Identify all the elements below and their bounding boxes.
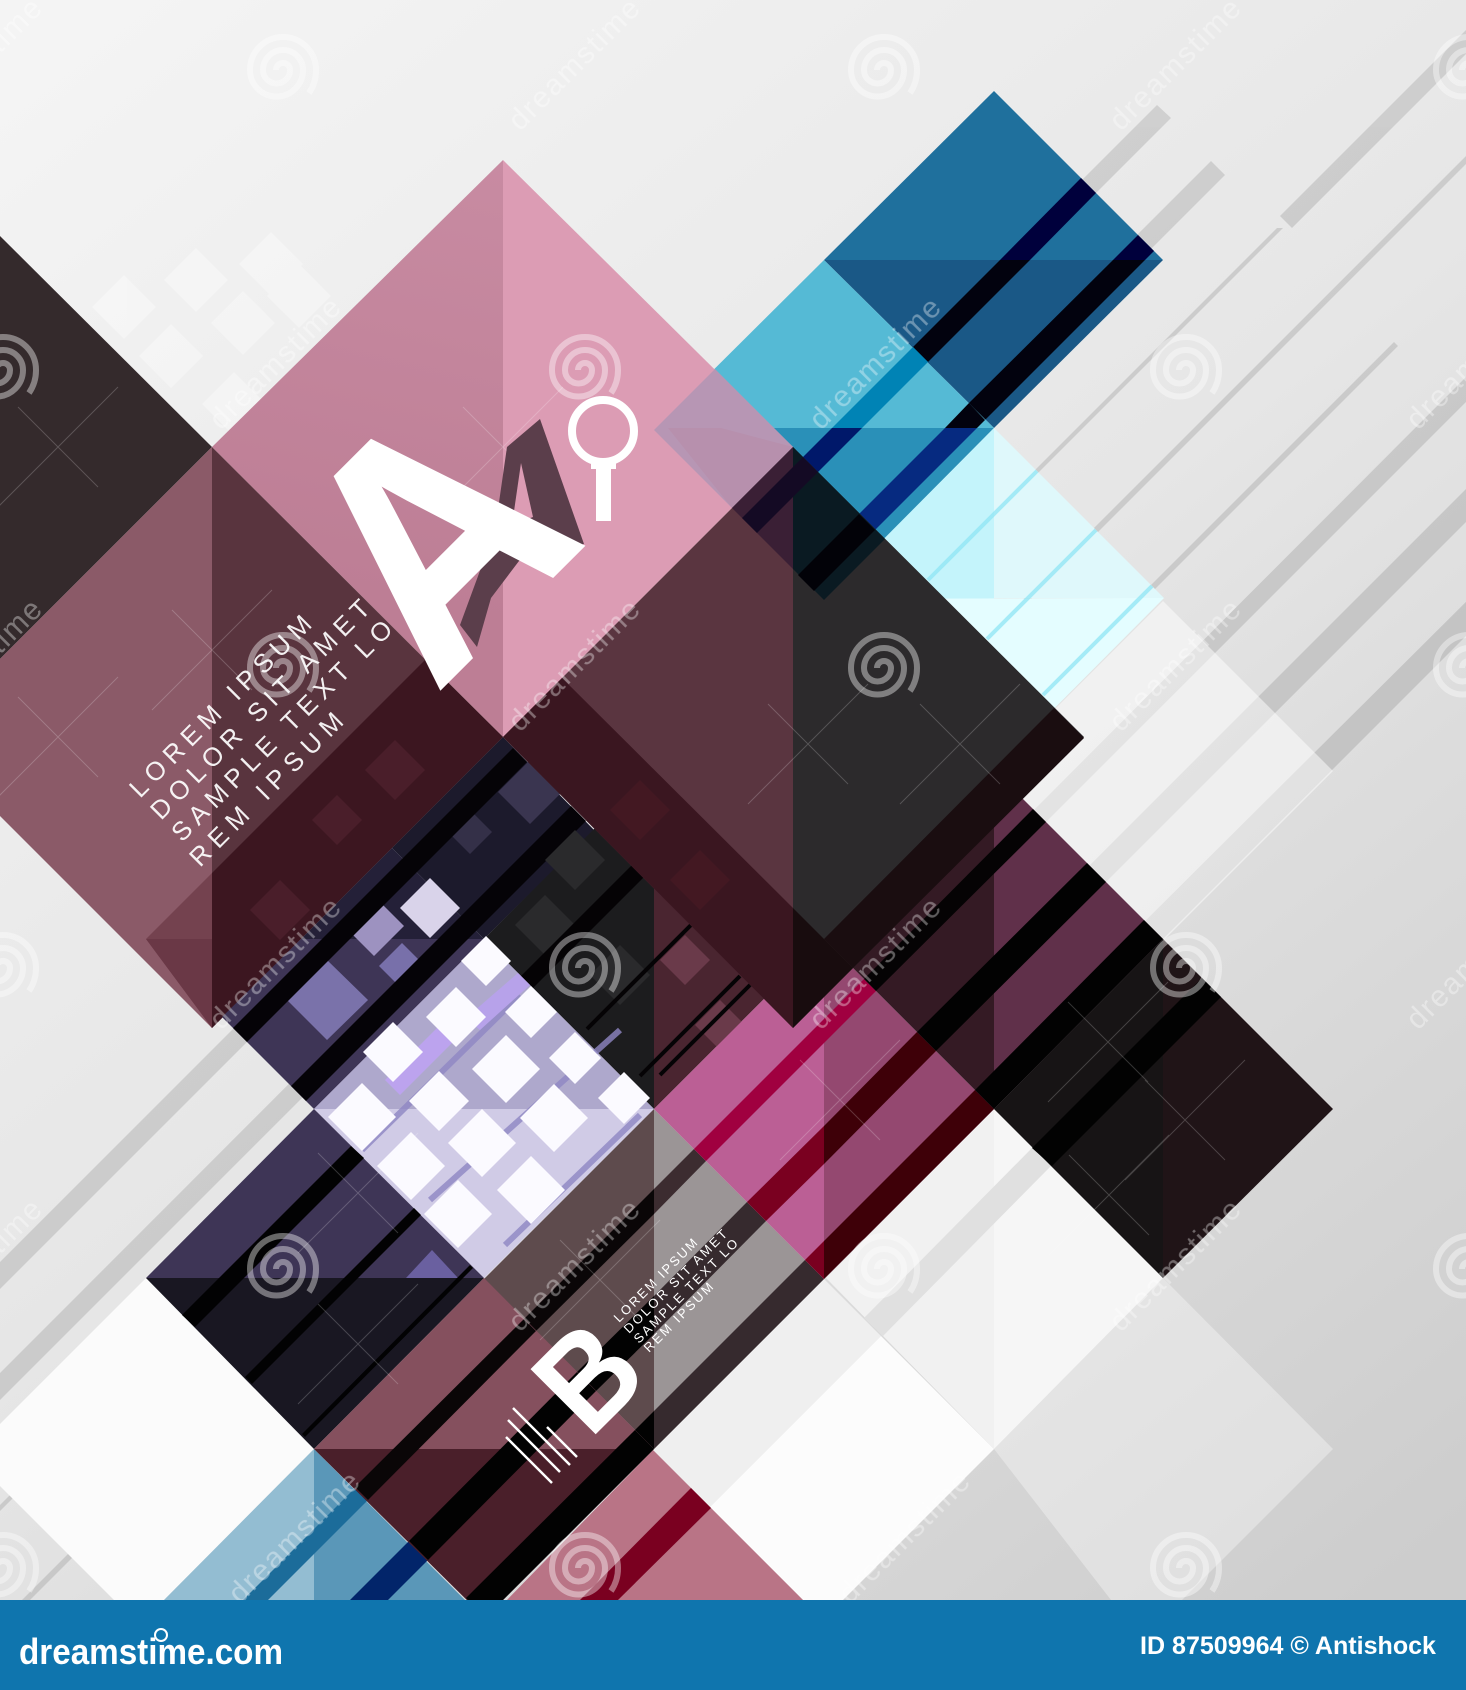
red stripe in pink triangle	[580, 1488, 711, 1600]
navy cell upper	[222, 737, 594, 1109]
blue square top	[824, 91, 1163, 428]
blue triangle bottom left	[164, 1449, 465, 1600]
watermark text: dreamstime	[203, 291, 348, 436]
light diamond right	[993, 601, 1333, 941]
text block B: LOREM IPSUM	[611, 1235, 700, 1325]
text block A: REM IPSUM	[183, 706, 349, 872]
text block B: REM IPSUM	[641, 1279, 716, 1355]
watermark text: dreamstime	[502, 593, 647, 738]
maroon diamond	[0, 447, 503, 1028]
watermark text: dreamstime	[222, 1465, 367, 1610]
watermark text: dreamstime	[1103, 1193, 1248, 1338]
mauve overlap	[654, 369, 793, 508]
watermark text: dreamstime	[203, 891, 348, 1036]
pink diamond	[212, 160, 793, 737]
white diamond lower left	[0, 1278, 314, 1600]
watermark text	[0, 302, 1466, 1600]
hatch icon	[506, 1408, 577, 1483]
white diamond lower middle	[826, 1109, 1163, 1449]
dark diamond	[503, 447, 1084, 1028]
navy cell lower left	[146, 1109, 484, 1449]
footer logo text: dreamstime.com	[19, 1631, 283, 1672]
black block right	[994, 939, 1333, 1278]
plum cell	[853, 798, 1163, 1109]
letter B: B	[505, 1294, 672, 1461]
grey cell	[484, 1109, 824, 1449]
letter A: A	[227, 332, 638, 743]
watermark text: dreamstime	[502, 1193, 647, 1338]
text block A: DOLOR SIT AMET	[144, 593, 376, 825]
watermark text: dreamstime	[803, 291, 948, 436]
dark tile cell centre	[486, 828, 764, 1109]
watermark text: dreamstime	[832, 1465, 977, 1610]
watermark text: dreamstime	[803, 891, 948, 1036]
thin construction lines	[0, 387, 1245, 1404]
pale tiles top left	[92, 232, 331, 436]
pink triangle bottom	[505, 1450, 805, 1602]
translucent diamond lower right	[994, 1278, 1332, 1600]
maroon cell bottom	[314, 1278, 654, 1618]
light blue square	[714, 260, 994, 538]
watermark text: dreamstime	[1103, 593, 1248, 738]
text block A: LOREM IPSUM	[123, 609, 317, 803]
icon: pin ring	[572, 400, 634, 521]
text block B: SAMPLE TEXT LO	[631, 1236, 741, 1346]
dark brown block left	[0, 236, 212, 659]
text block B: DOLOR SIT AMET	[621, 1226, 730, 1336]
cyan square	[884, 428, 1164, 708]
magenta cell	[654, 939, 994, 1279]
text block A: SAMPLE TEXT LO	[165, 614, 398, 847]
footer banner	[0, 1600, 1466, 1690]
shadow letter A	[460, 419, 584, 647]
white tile cell	[314, 936, 654, 1278]
footer credit: ID 87509964 © Antishock	[1140, 1632, 1436, 1660]
white band lower centre	[653, 1279, 994, 1620]
